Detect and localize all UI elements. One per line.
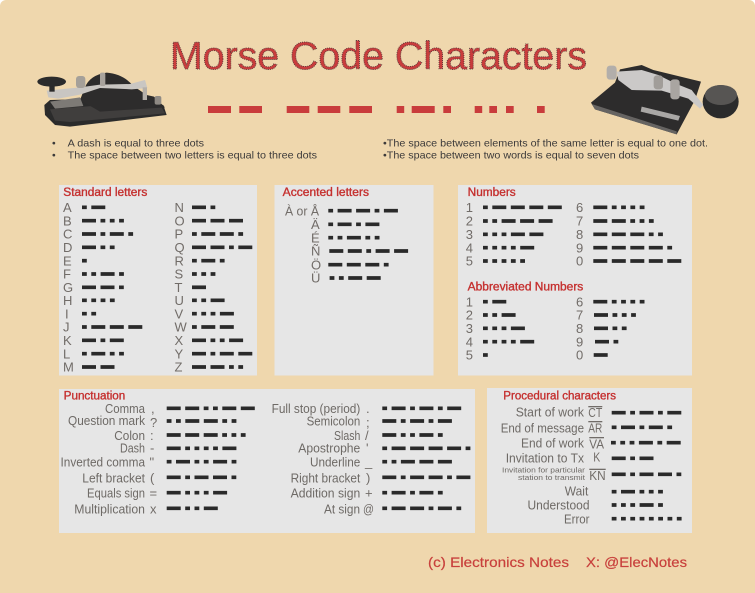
icon: telegraph key left — [37, 73, 167, 127]
abbreviated number rows: 2 — [466, 308, 473, 323]
panel: numbers — [458, 185, 692, 376]
numbers rows: 3 — [466, 227, 473, 242]
punctuation rows left: Inverted comma — [60, 455, 146, 470]
footer credit: X: @ElecNotes — [586, 554, 687, 570]
procedural rows: AR — [588, 420, 602, 435]
punctuation rows right: _ — [364, 455, 373, 470]
punctuation rows left: " — [150, 455, 154, 470]
punctuation rows right: @ — [363, 501, 374, 516]
letters A to M: C — [63, 227, 72, 242]
panel: standard letters — [59, 185, 257, 376]
procedural rows: KN — [589, 468, 606, 483]
letters N to Z: R — [174, 253, 184, 268]
punctuation rows right: / — [365, 428, 369, 443]
accented rows: Ä — [311, 217, 320, 232]
letters A to M: E — [63, 253, 72, 268]
punctuation rows right: Full stop (period) — [272, 401, 360, 416]
numbers rows: 1 — [466, 200, 473, 215]
heading: abbreviated numbers: Abbreviated Numbers — [468, 282, 584, 294]
accented rows — [285, 203, 413, 286]
procedural rows: CT — [588, 405, 602, 420]
letters A to M: K — [63, 333, 72, 348]
numbers rows: 4 — [466, 240, 473, 255]
punctuation rows left: Comma — [105, 401, 146, 416]
numbers rows: 6 — [576, 200, 583, 215]
letters N to Z: W — [174, 320, 188, 335]
rules: left column: • — [52, 150, 56, 162]
punctuation rows left: ( — [150, 470, 155, 485]
procedural rows: End of message — [501, 420, 584, 435]
letters A to M: A — [63, 200, 72, 215]
letters A to M: B — [63, 213, 72, 228]
letters N to Z: N — [174, 200, 184, 215]
rules: right column — [383, 137, 708, 162]
letters A to M — [63, 200, 147, 375]
procedural rows: K — [593, 450, 601, 465]
procedural rows: Understood — [528, 497, 590, 512]
numbers rows: 7 — [576, 214, 583, 229]
punctuation rows right: Underline — [310, 455, 360, 470]
punctuation rows right: Right bracket — [291, 470, 361, 485]
rules: right column: •The space between two words is equal to seven dots — [383, 150, 639, 162]
punctuation rows right: ) — [366, 470, 370, 485]
letters A to M: J — [63, 320, 70, 335]
punctuation rows right: ' — [366, 441, 368, 456]
heading: punctuation: Punctuation — [64, 390, 125, 402]
letters A to M: M — [63, 360, 74, 375]
letters N to Z: T — [174, 280, 182, 295]
heading: numbers: Numbers — [468, 187, 516, 199]
letters A to M: G — [63, 280, 73, 295]
punctuation rows left: , — [151, 401, 155, 416]
procedural rows: Wait — [565, 484, 589, 499]
numbers rows: 9 — [576, 240, 583, 255]
punctuation rows left: ? — [150, 415, 157, 430]
punctuation rows left: Equals sign — [87, 486, 145, 501]
abbreviated number rows: 9 — [576, 334, 583, 349]
rules: left column — [52, 137, 317, 162]
punctuation rows right: ; — [366, 415, 370, 430]
punctuation rows left: : — [150, 428, 154, 443]
numbers rows: 5 — [466, 254, 473, 269]
letters A to M: H — [63, 293, 72, 308]
abbreviated number rows: 7 — [576, 308, 583, 323]
icon: telegraph key right — [591, 65, 739, 134]
punctuation rows right: Semicolon — [307, 413, 360, 428]
abbreviated number rows: 8 — [576, 321, 583, 336]
letters N to Z: Q — [174, 240, 185, 255]
letters A to M: L — [63, 346, 70, 361]
punctuation rows left: Left bracket — [82, 470, 145, 485]
punctuation rows left: Dash — [120, 441, 145, 456]
title morse code strip — [208, 106, 545, 113]
procedural rows: Invitation for particular — [502, 466, 586, 475]
procedural rows: Error — [564, 511, 590, 526]
abbreviated number rows: 4 — [466, 334, 473, 349]
letters N to Z: U — [174, 293, 184, 308]
punctuation rows right: At sign — [324, 501, 360, 516]
abbreviated number rows: 0 — [576, 348, 583, 363]
punctuation rows right — [272, 401, 475, 516]
letters A to M: F — [63, 267, 71, 282]
abbreviated number rows: 1 — [466, 294, 473, 309]
punctuation rows right: . — [366, 401, 370, 416]
heading: procedural characters: Procedural characters — [503, 390, 616, 402]
accented rows: Ö — [311, 257, 321, 272]
abbreviated number rows: 6 — [576, 294, 583, 309]
letters N to Z: S — [174, 267, 184, 282]
heading: accented letters: Accented letters — [283, 187, 369, 199]
numbers rows: 8 — [576, 227, 583, 242]
abbreviated number rows: 3 — [466, 321, 473, 336]
letters N to Z — [174, 200, 257, 375]
procedural rows: Start of work — [516, 405, 584, 420]
punctuation rows right: Addition sign — [291, 486, 360, 501]
letters A to M: D — [63, 240, 72, 255]
title: Morse Code Characters — [170, 35, 587, 78]
procedural rows: Invitation to Tx — [506, 450, 584, 465]
footer credit — [428, 554, 687, 570]
punctuation rows left: = — [150, 486, 157, 501]
procedural rows: station to transmit — [518, 473, 586, 482]
heading: standard letters: Standard letters — [63, 187, 148, 199]
numbers rows — [466, 200, 686, 269]
letters N to Z: P — [174, 227, 183, 242]
punctuation rows left: Colon — [114, 428, 145, 443]
rules: left column: A dash is equal to three dots — [68, 137, 204, 149]
punctuation rows left: x — [150, 501, 157, 516]
panel: punctuation — [59, 389, 475, 533]
procedural rows: End of work — [521, 436, 584, 451]
accented rows: Ü — [311, 271, 320, 286]
letters N to Z: X — [174, 333, 184, 348]
accented rows: À or Å — [285, 203, 319, 218]
letters N to Z: Y — [174, 346, 184, 361]
numbers rows: 2 — [466, 214, 473, 229]
letters A to M: I — [65, 306, 69, 321]
punctuation rows right: Apostrophe — [298, 441, 360, 456]
punctuation rows left — [60, 401, 259, 516]
accented rows: Ñ — [311, 244, 320, 259]
footer credit: (c) Electronics Notes — [428, 554, 569, 570]
punctuation rows left: Multiplication — [74, 501, 145, 516]
punctuation rows left: - — [150, 441, 154, 456]
panel: accented letters — [274, 185, 434, 376]
punctuation rows right: + — [365, 486, 373, 501]
accented rows: É — [311, 230, 320, 245]
rules: left column: The space between two letters is equal to three dots — [68, 150, 317, 162]
punctuation rows right: Slash — [334, 428, 360, 443]
abbreviated number rows — [466, 294, 649, 363]
abbreviated number rows: 5 — [466, 348, 473, 363]
procedural rows: VA — [589, 436, 604, 451]
rules: left column: • — [52, 137, 56, 149]
letters N to Z: V — [174, 306, 184, 321]
punctuation rows left: Question mark — [68, 413, 145, 428]
letters N to Z: O — [174, 213, 185, 228]
procedural rows — [501, 405, 686, 526]
panel: procedural characters — [487, 388, 692, 533]
numbers rows: 0 — [576, 254, 583, 269]
rules: right column: •The space between elements of the same letter is equal to one dot. — [383, 137, 708, 149]
letters N to Z: Z — [174, 360, 182, 375]
